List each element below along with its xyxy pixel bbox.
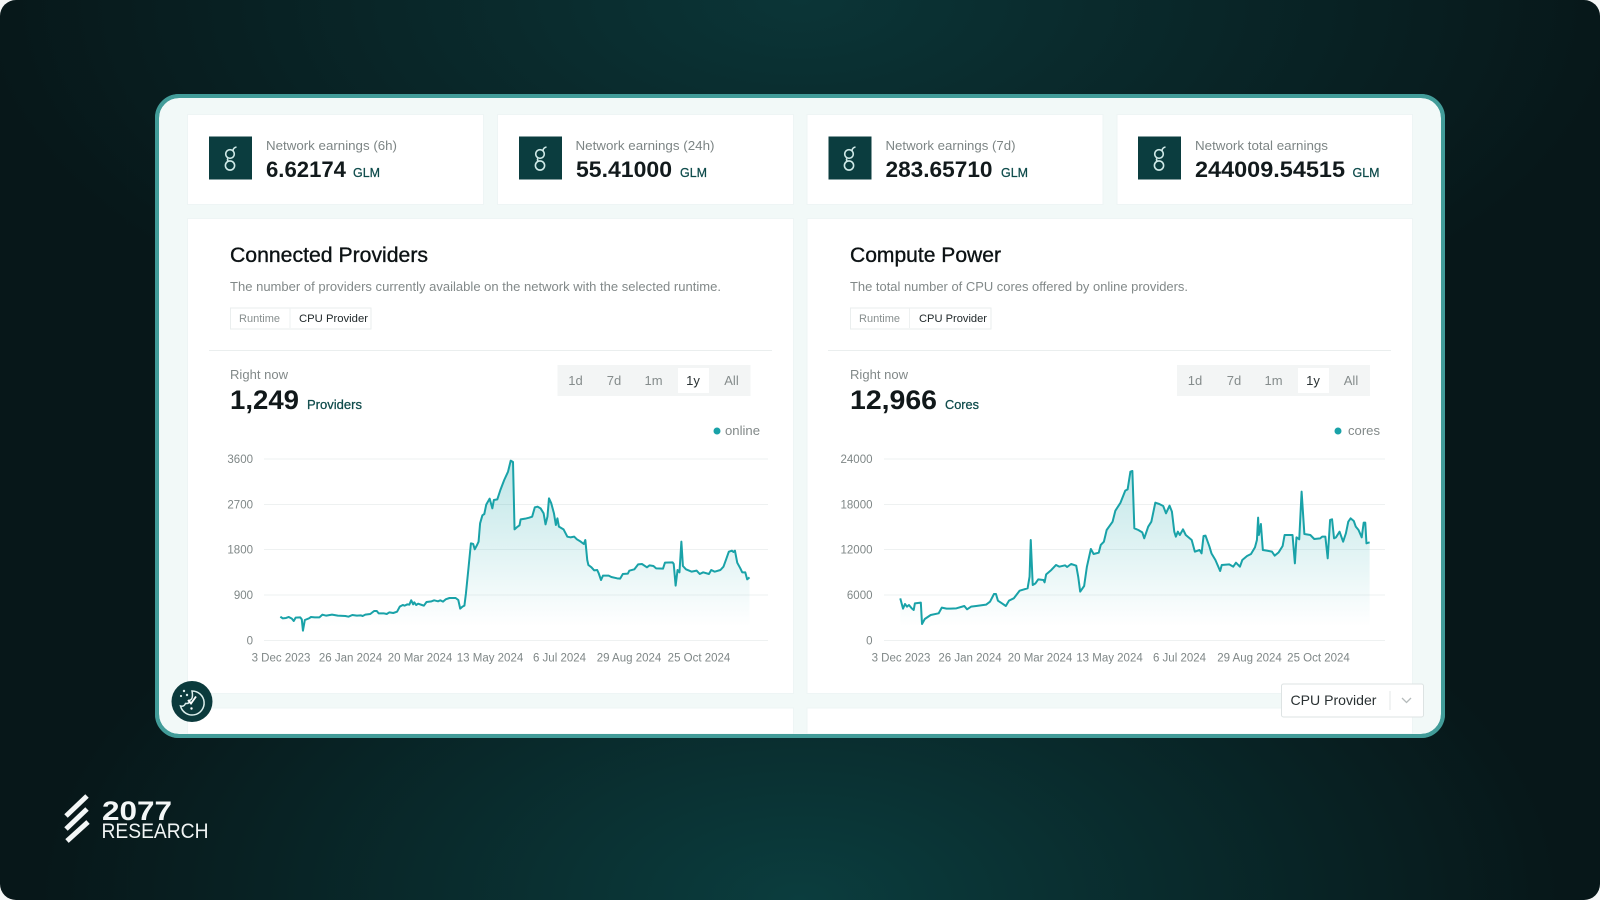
value unit: Cores [945, 397, 979, 412]
unit: GLM [1001, 165, 1028, 180]
legend: cores [1334, 423, 1380, 438]
x axis labels [872, 652, 1350, 664]
runtime tag [850, 308, 991, 329]
time range selector: 7d [1227, 373, 1241, 388]
unit: GLM [353, 165, 380, 180]
panel: lower left (cropped) [188, 708, 794, 734]
x axis labels: 29 Aug 2024 [597, 652, 662, 664]
label: Network total earnings [1195, 138, 1329, 153]
y axis labels: 2700 [227, 500, 253, 512]
stat card: network earnings 6h [188, 114, 484, 204]
x axis labels: 3 Dec 2023 [252, 652, 310, 664]
y axis labels: 3600 [227, 454, 253, 466]
right now label: Right now [230, 367, 289, 382]
unit: GLM [680, 165, 707, 180]
stat card: network earnings 24h [498, 114, 794, 204]
wordmark: 2077 [102, 796, 172, 826]
x axis labels: 6 Jul 2024 [1153, 652, 1207, 664]
y axis labels: 18000 [841, 500, 872, 512]
area and line [280, 461, 749, 640]
label: Network earnings (6h) [266, 138, 397, 153]
y axis labels: 6000 [847, 590, 872, 602]
runtime tag: Runtime [239, 313, 280, 325]
time range selector [1177, 365, 1370, 396]
heading: Connected Providers [230, 244, 428, 267]
right now label: Right now [850, 367, 909, 382]
panel: lower right (cropped) [807, 708, 1412, 734]
time range selector [558, 365, 750, 396]
y axis labels: 12000 [841, 544, 872, 556]
dropdown: cpu provider: CPU Provider [1290, 692, 1377, 708]
time range selector: 1m [644, 373, 663, 388]
x axis labels: 29 Aug 2024 [1217, 652, 1282, 664]
label: Network earnings (7d) [886, 138, 1016, 153]
icon: golem logo [209, 136, 252, 180]
runtime tag: CPU Provider [919, 313, 987, 325]
y axis labels [227, 454, 253, 648]
time range selector: 1d [1188, 373, 1202, 388]
y axis labels: 0 [247, 636, 253, 648]
x axis labels: 25 Oct 2024 [1287, 652, 1350, 664]
label: Network earnings (24h) [576, 138, 714, 153]
line chart: compute power [841, 454, 1385, 664]
description: The number of providers currently available on the network with the selected runtime. [230, 279, 721, 294]
dashboard window [157, 96, 1443, 736]
icon: logo bars [66, 796, 88, 841]
y axis labels [841, 454, 872, 648]
time range selector: 1y [1306, 373, 1320, 388]
dropdown: cpu provider [1282, 684, 1424, 717]
x axis labels: 13 May 2024 [1076, 652, 1143, 664]
value: 6.62174 [266, 157, 347, 182]
time range selector: 1m [1264, 373, 1283, 388]
x axis labels: 20 Mar 2024 [388, 652, 453, 664]
icon: cookie consent badge [172, 681, 212, 722]
y axis labels: 0 [866, 636, 872, 648]
x axis labels: 26 Jan 2024 [938, 652, 1002, 664]
logo: 2077 research: RESEARCH [102, 820, 208, 843]
value: 55.41000 [576, 157, 672, 182]
y axis labels: 1800 [227, 544, 253, 556]
current value: 12,966 [850, 385, 937, 415]
time range selector: 1d [568, 373, 583, 388]
area and line [900, 471, 1370, 640]
value: 244009.54515 [1195, 157, 1345, 182]
panel: compute power [807, 218, 1412, 694]
icon: golem logo [1138, 136, 1181, 180]
time range selector: 1y [686, 373, 700, 388]
x axis labels [252, 652, 731, 664]
stat card: network earnings 7d [807, 114, 1103, 204]
legend: online: online [725, 423, 760, 438]
x axis labels: 3 Dec 2023 [872, 652, 930, 664]
stat card: network total earnings [1117, 114, 1412, 204]
x axis labels: 26 Jan 2024 [319, 652, 383, 664]
runtime tag [230, 308, 371, 329]
time range selector: 7d [607, 373, 621, 388]
current value: 1,249 [230, 385, 299, 415]
logo: 2077 research [66, 796, 208, 843]
time range selector: All [1344, 373, 1358, 388]
description: The total number of CPU cores offered by online providers. [850, 279, 1188, 294]
line chart: connected providers [227, 454, 768, 664]
heading: Compute Power [850, 244, 1001, 267]
value unit: Providers [307, 397, 362, 412]
legend: cores: cores [1348, 423, 1380, 438]
y axis labels: 24000 [841, 454, 872, 466]
unit: GLM [1352, 165, 1380, 180]
time range selector: All [724, 373, 739, 388]
x axis labels: 20 Mar 2024 [1008, 652, 1073, 664]
icon: golem logo [828, 136, 872, 180]
runtime tag: CPU Provider [299, 313, 368, 325]
value: 283.65710 [886, 157, 992, 182]
x axis labels: 13 May 2024 [457, 652, 524, 664]
panel: connected providers [188, 218, 794, 694]
x axis labels: 25 Oct 2024 [668, 652, 731, 664]
x axis labels: 6 Jul 2024 [533, 652, 587, 664]
icon: golem logo [519, 136, 562, 180]
y axis labels: 900 [234, 590, 253, 602]
runtime tag: Runtime [859, 313, 900, 325]
